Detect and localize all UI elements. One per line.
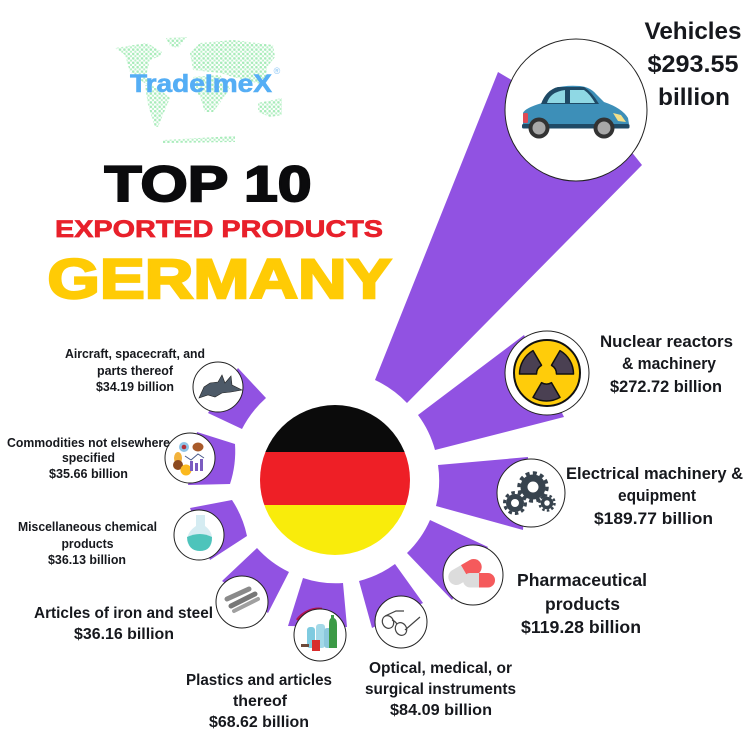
label: aircraft: $34.19 billion	[96, 380, 174, 394]
icon circle: commodities	[165, 433, 215, 483]
label: pharmaceutical: Pharmaceutical	[517, 570, 647, 590]
label: pharmaceutical: $119.28 billion	[521, 617, 641, 637]
label: commodities: Commodities not elsewhere	[7, 436, 170, 450]
label: vehicles: billion	[658, 84, 730, 111]
label: nuclear: & machinery	[622, 355, 717, 373]
label: electrical: Electrical machinery &	[566, 465, 743, 483]
bar: commodities	[188, 432, 235, 485]
heading: Germany: GERMANY	[48, 247, 391, 310]
item 3: electrical machinery	[436, 457, 743, 530]
title: TOP 10: TOP 10	[104, 156, 312, 212]
label: optical: surgical instruments	[365, 681, 516, 698]
bar: optical	[359, 564, 423, 628]
label: nuclear: $272.72 billion	[610, 378, 722, 396]
label: chemical	[18, 520, 157, 567]
bar: nuclear	[418, 335, 564, 450]
label: plastics: Plastics and articles	[186, 672, 332, 689]
label: plastics: $68.62 billion	[209, 714, 309, 731]
bar: chemical	[190, 500, 247, 560]
label: pharmaceutical: products	[545, 594, 620, 614]
label: iron and steel: Articles of iron and steel	[34, 605, 213, 622]
label: iron and steel: $36.16 billion	[74, 626, 174, 643]
item 2: nuclear reactors	[418, 331, 733, 450]
label: optical	[365, 660, 516, 719]
icon circle: bottles	[294, 609, 346, 661]
item 1: vehicles	[375, 18, 742, 403]
bar: electrical	[436, 457, 528, 530]
icon circle: glasses	[375, 596, 427, 648]
label: nuclear	[600, 333, 733, 396]
item 7: iron and steel	[34, 548, 289, 643]
icon circle: gears	[497, 459, 565, 527]
label: electrical	[566, 465, 743, 528]
label: chemical: products	[62, 537, 114, 551]
label: commodities: specified	[62, 451, 115, 465]
icon circle: radiation	[505, 331, 589, 415]
central German flag	[260, 405, 410, 555]
bar: pharmaceutical	[407, 520, 488, 600]
label: commodities	[7, 436, 170, 481]
label: pharmaceutical	[517, 570, 647, 637]
bar: aircraft	[208, 368, 266, 429]
label: electrical: $189.77 billion	[594, 510, 713, 528]
registered mark: ®	[274, 66, 281, 76]
item 9: commodities	[7, 432, 235, 485]
item 6: plastics	[186, 578, 347, 731]
label: optical: Optical, medical, or	[369, 660, 512, 677]
item 8: miscellaneous chemical products	[18, 500, 247, 567]
label: chemical: Miscellaneous chemical	[18, 520, 157, 534]
bar: iron and steel	[222, 548, 289, 613]
label: commodities: $35.66 billion	[49, 467, 128, 481]
label: plastics	[186, 672, 332, 731]
label: plastics: thereof	[233, 693, 288, 710]
accent arc: plastics	[297, 609, 322, 620]
label: aircraft: parts thereof	[97, 364, 174, 378]
bar: plastics	[288, 578, 347, 627]
icon circle: flask	[174, 510, 224, 560]
logo wordmark: TradeImeX	[130, 70, 272, 98]
label: vehicles	[644, 18, 742, 111]
icon circle: car	[505, 39, 647, 181]
subtitle: exported products: EXPORTED PRODUCTS	[55, 216, 383, 243]
world map of green dots	[115, 37, 282, 143]
label: electrical: equipment	[618, 487, 696, 505]
label: optical: $84.09 billion	[390, 702, 492, 719]
item 4: pharmaceutical products	[407, 520, 647, 637]
icon circle: steel bars	[216, 576, 268, 628]
bar: vehicles	[375, 72, 642, 403]
label: vehicles: $293.55	[648, 51, 738, 78]
label: aircraft: Aircraft, spacecraft, and	[65, 347, 205, 361]
label: chemical: $36.13 billion	[48, 553, 126, 567]
item 5: optical instruments	[359, 564, 516, 719]
icon circle: pills	[443, 545, 503, 605]
item 10: aircraft	[65, 347, 266, 429]
label: aircraft	[65, 347, 205, 394]
icon circle: jet	[193, 362, 243, 412]
label: nuclear: Nuclear reactors	[600, 333, 733, 351]
label: vehicles: Vehicles	[644, 18, 742, 45]
label: iron and steel	[34, 605, 213, 643]
logo: TradeImeX	[115, 37, 282, 143]
